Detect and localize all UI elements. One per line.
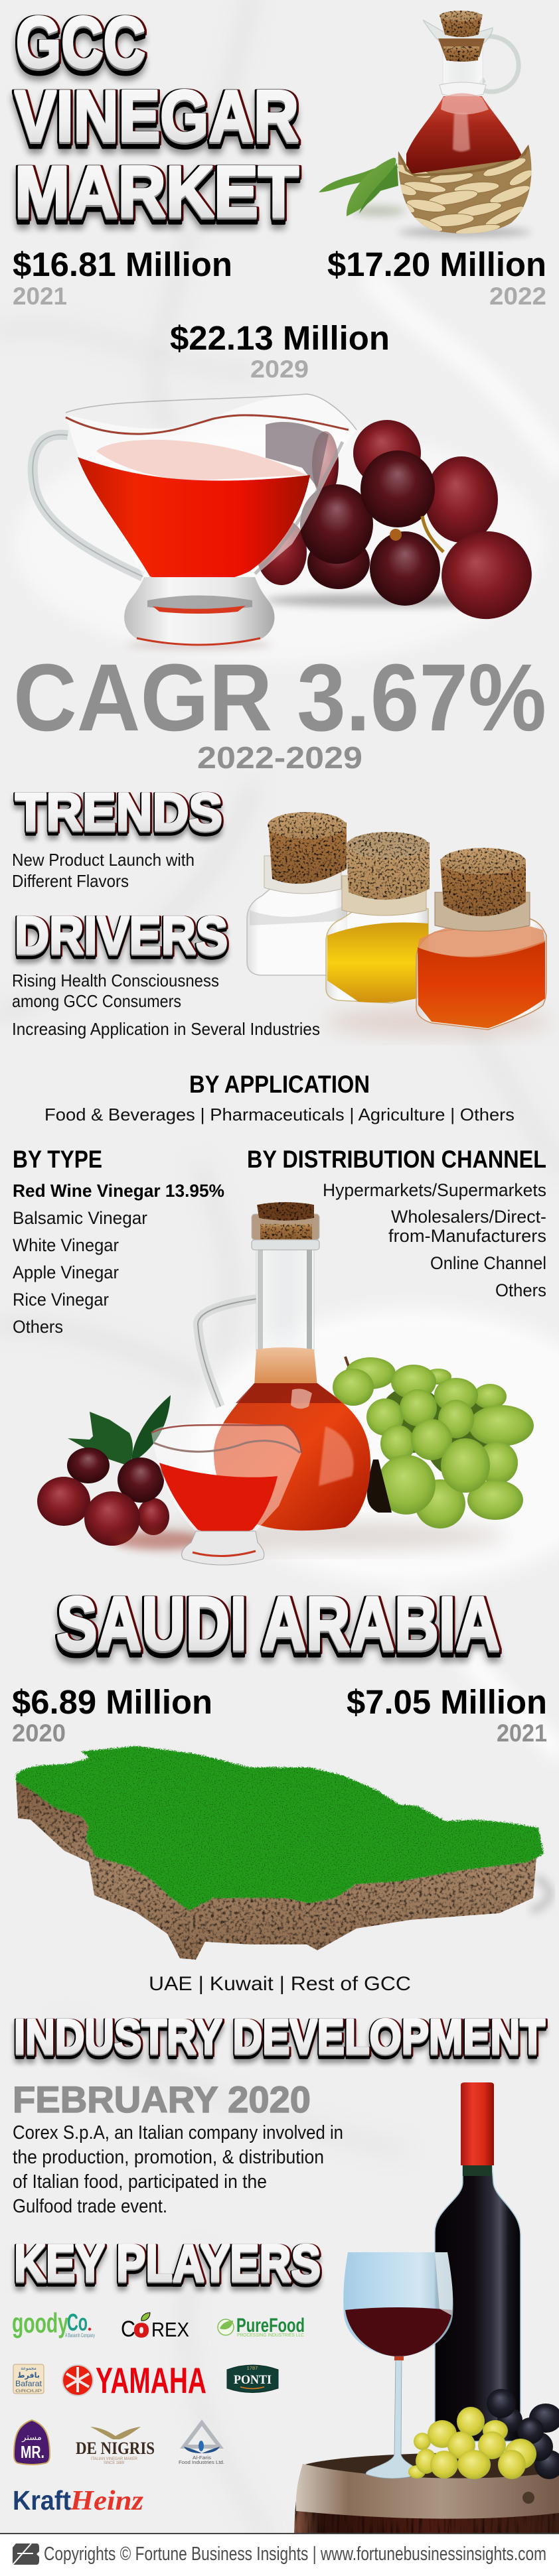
segment: by distribution channel: Wholesalers/Direct- [391, 1207, 546, 1227]
bottle [435, 2082, 520, 2441]
stat: 2021 market value [13, 245, 232, 310]
segment: by type: BY TYPE [13, 1146, 102, 1173]
grass [16, 1746, 544, 1911]
soil [16, 1778, 536, 1960]
text block: February 2020 development: Corex S.p.A, an Italian company involved in [13, 2122, 343, 2143]
text block: trends: Different Flavors [12, 871, 129, 891]
icon: three cork jars of vinegar [247, 812, 551, 1036]
red grapes and leaves [37, 1395, 171, 1546]
logo: Al-Faris: Al-Faris [193, 2456, 212, 2461]
segment: by type: Apple Vinegar [13, 1262, 119, 1282]
logo: Mr: MR. [21, 2442, 44, 2462]
stat: Saudi Arabia 2020: 2020 [12, 1720, 66, 1747]
bottle [198, 1202, 370, 1530]
segment: by type [13, 1146, 224, 1337]
text block: February 2020 development: Gulfood trade event. [13, 2196, 167, 2217]
stat: 2029 market value: $22.13 Million [170, 319, 390, 357]
logo: Corex: o [134, 2315, 149, 2342]
logo: Mr [14, 2420, 50, 2465]
CAGR figure: 2022-2029 [197, 740, 362, 775]
stat: 2021 market value: $16.81 Million [13, 245, 232, 283]
grapes [408, 2389, 559, 2479]
heading: Drivers: DRIVERS [15, 906, 228, 965]
jar: yellow [326, 832, 430, 1003]
logo: Al-Faris: Food Industries Ltd. [179, 2461, 224, 2465]
logo: PureFood: PureFood [236, 2315, 305, 2337]
icon: Fortune Business Insights logo [13, 2543, 39, 2565]
segment: by type: White Vinegar [13, 1235, 119, 1255]
segment: by type: Red Wine Vinegar 13.95% [13, 1181, 224, 1201]
stat: 2022 market value: $17.20 Million [327, 245, 546, 283]
logo: Bafarat Group: بافرط [17, 2372, 40, 2380]
logo: Kraft Heinz [13, 2485, 144, 2516]
small boat [113, 1423, 301, 1565]
logo: Bafarat Group: مجموعة [21, 2366, 37, 2371]
stat: 2029 market value [170, 319, 390, 383]
stat: Saudi Arabia 2021: 2021 [497, 1720, 547, 1747]
text block: drivers: Increasing Application in Several Industries [12, 1019, 320, 1039]
logo: De Nigris: DE NIGRIS [76, 2439, 155, 2458]
logo: PureFood [218, 2315, 305, 2338]
logo: Kraft Heinz: Heinz [70, 2486, 144, 2516]
stat: 2021 market value: 2021 [13, 283, 67, 310]
segment: by application: BY APPLICATION [189, 1071, 370, 1098]
green grapes [333, 1357, 534, 1528]
title: GCC Vinegar Market: VINEGAR [15, 76, 299, 157]
segment: by type: Others [13, 1317, 63, 1337]
logo: PureFood: PROCESSING INDUSTRIES LLC [237, 2332, 305, 2338]
logo: Mr: مستر [21, 2432, 42, 2443]
stat: Saudi Arabia 2021: $7.05 Million [347, 1683, 547, 1721]
icon: gravy boat of red vinegar and red grapes [33, 394, 542, 649]
logo: Ponti [227, 2365, 278, 2392]
logo: Yamaha [62, 2360, 206, 2401]
logo: De Nigris [76, 2427, 155, 2465]
segment: by type: Rice Vinegar [13, 1290, 109, 1310]
logo: Corex [121, 2313, 189, 2342]
logo: Ponti: 1787 [247, 2365, 258, 2371]
logo: Kraft Heinz: Kraft [13, 2485, 71, 2516]
stat: Saudi Arabia 2020 [12, 1683, 212, 1747]
segment: by distribution channel: Hypermarkets/Supermarkets [323, 1180, 546, 1200]
text block: February 2020 development: of Italian food, participated in the [13, 2171, 267, 2193]
logo: Yamaha: YAMAHA [96, 2360, 206, 2401]
logo: Goody Co: Co [67, 2309, 88, 2336]
logo: Corex: REX [151, 2318, 189, 2341]
stat: 2029 market value: 2029 [250, 356, 309, 383]
text block: February 2020 development: the production, promotion, & distribution [13, 2147, 324, 2168]
jar: orange [416, 848, 546, 1030]
logo: Bafarat Group: Bafarat [15, 2379, 42, 2388]
text: other regions: UAE | Kuwait | Rest of GCC [149, 1973, 411, 1995]
logo: Goody Co: A Basamh Company [65, 2333, 95, 2339]
segment: by distribution channel: Online Channel [430, 1253, 546, 1273]
segment: by distribution channel [247, 1146, 546, 1300]
glass [343, 2252, 453, 2478]
text block: trends [12, 850, 195, 891]
logo: Bafarat Group [13, 2364, 44, 2394]
title: GCC Vinegar Market: GCC [16, 2, 145, 83]
segment: by application: Food & Beverages | Pharmaceuticals | Agriculture | Others [44, 1105, 515, 1124]
segment: by application [44, 1071, 515, 1124]
text block: drivers: Rising Health Consciousness [12, 971, 219, 990]
heading: Trends: TRENDS [15, 782, 222, 841]
icon: wine bottle, glass, grapes and barrel [294, 2082, 559, 2534]
logo: De Nigris: SINCE 1889 [104, 2461, 125, 2465]
segment: by distribution channel: from-Manufacturers [388, 1226, 546, 1246]
stat: 2022 market value: 2022 [489, 283, 546, 310]
heading: Key Players: KEY PLAYERS [14, 2234, 321, 2292]
logo: Al-Faris [179, 2423, 224, 2465]
stat: Saudi Arabia 2020: $6.89 Million [12, 1683, 212, 1721]
stat: Saudi Arabia 2021 [347, 1683, 547, 1747]
stat: 2022 market value [327, 245, 546, 310]
footer [0, 2533, 559, 2576]
jar: clear [247, 812, 347, 975]
icon: vinegar bottle with grapes and small boat [37, 1202, 534, 1565]
text block: drivers [12, 971, 320, 1039]
title: GCC Vinegar Market: MARKET [15, 151, 299, 232]
logo: Ponti: PONTI [234, 2373, 272, 2387]
map: grass and soil relief of Saudi Arabia [16, 1746, 550, 1960]
text block: February 2020 development: FEBRUARY 2020 [13, 2078, 311, 2120]
text block: February 2020 development [13, 2078, 343, 2217]
logo: Bafarat Group: GROUP [15, 2390, 42, 2394]
segment: by type: Balsamic Vinegar [13, 1208, 147, 1228]
segment: by distribution channel: Others [495, 1280, 546, 1300]
logo: Goody Co: goody [12, 2307, 68, 2339]
text block: trends: New Product Launch with [12, 850, 195, 870]
text block: drivers: among GCC Consumers [12, 991, 181, 1011]
title: GCC Vinegar Market [15, 2, 299, 232]
logo: Corex: C [121, 2317, 135, 2342]
barrel [294, 2453, 559, 2534]
icon: vinegar bottle in wicker basket with leaves [319, 11, 538, 239]
logo: De Nigris: ITALIAN VINEGAR MAKER [91, 2457, 138, 2461]
